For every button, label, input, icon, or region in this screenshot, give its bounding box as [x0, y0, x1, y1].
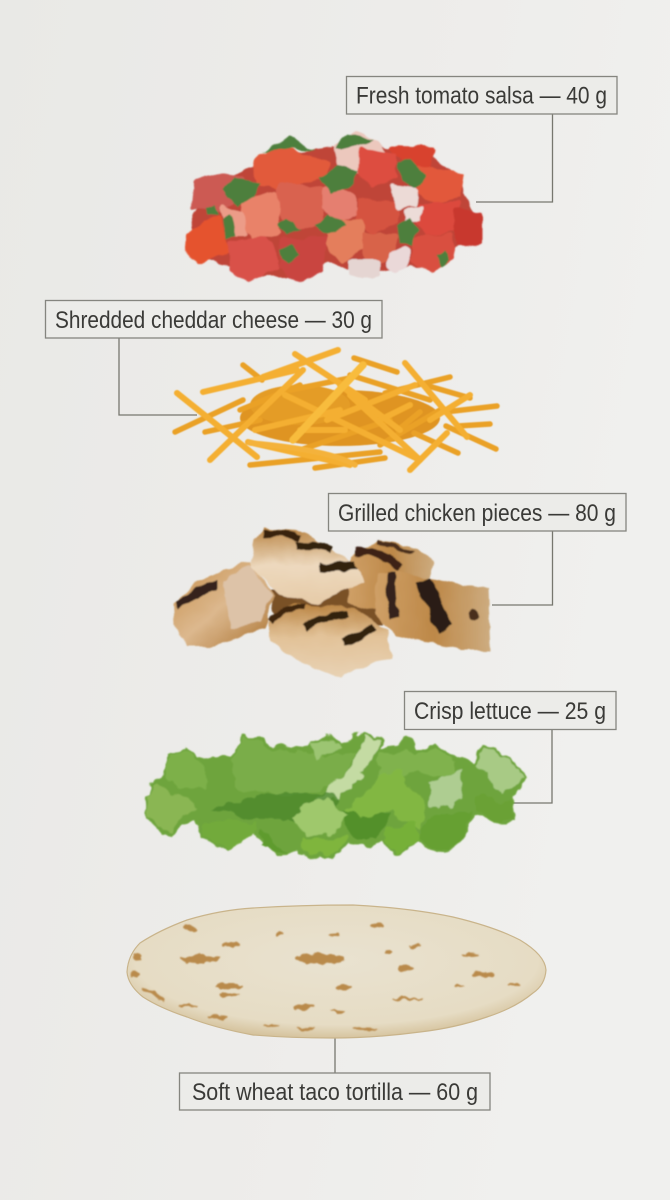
label: cheese — [46, 300, 382, 338]
label: tortilla: Soft wheat taco tortilla — 60 g — [192, 1079, 478, 1106]
label: chicken — [328, 494, 626, 531]
label: lettuce — [404, 692, 616, 730]
connector: chicken — [492, 531, 552, 605]
connector: tortilla — [334, 1037, 336, 1073]
cilantro — [204, 134, 450, 267]
illustration: tomato salsa — [188, 134, 480, 279]
label: lettuce: Crisp lettuce — 25 g — [414, 698, 606, 725]
connector: cheese — [119, 338, 197, 415]
illustration: soft wheat tortilla — [127, 905, 546, 1038]
shadow under pieces — [268, 588, 383, 623]
label: tortilla — [180, 1073, 490, 1110]
illustration: crisp lettuce — [146, 733, 521, 861]
chicken: right piece — [375, 571, 491, 650]
chicken: back piece — [348, 541, 435, 610]
connector: lettuce — [512, 729, 552, 803]
chicken: bottom piece — [268, 603, 391, 678]
connector: salsa — [476, 114, 552, 202]
label: cheese: Shredded cheddar cheese — 30 g — [55, 307, 372, 334]
illustration: grilled chicken pieces — [175, 528, 491, 678]
label: salsa: Fresh tomato salsa — 40 g — [356, 82, 607, 110]
label: salsa — [346, 76, 617, 114]
illustration: shredded cheddar cheese — [175, 350, 497, 470]
chicken: left piece — [175, 561, 275, 646]
label: chicken: Grilled chicken pieces — 80 g — [338, 500, 616, 527]
chicken: top piece — [251, 528, 365, 603]
